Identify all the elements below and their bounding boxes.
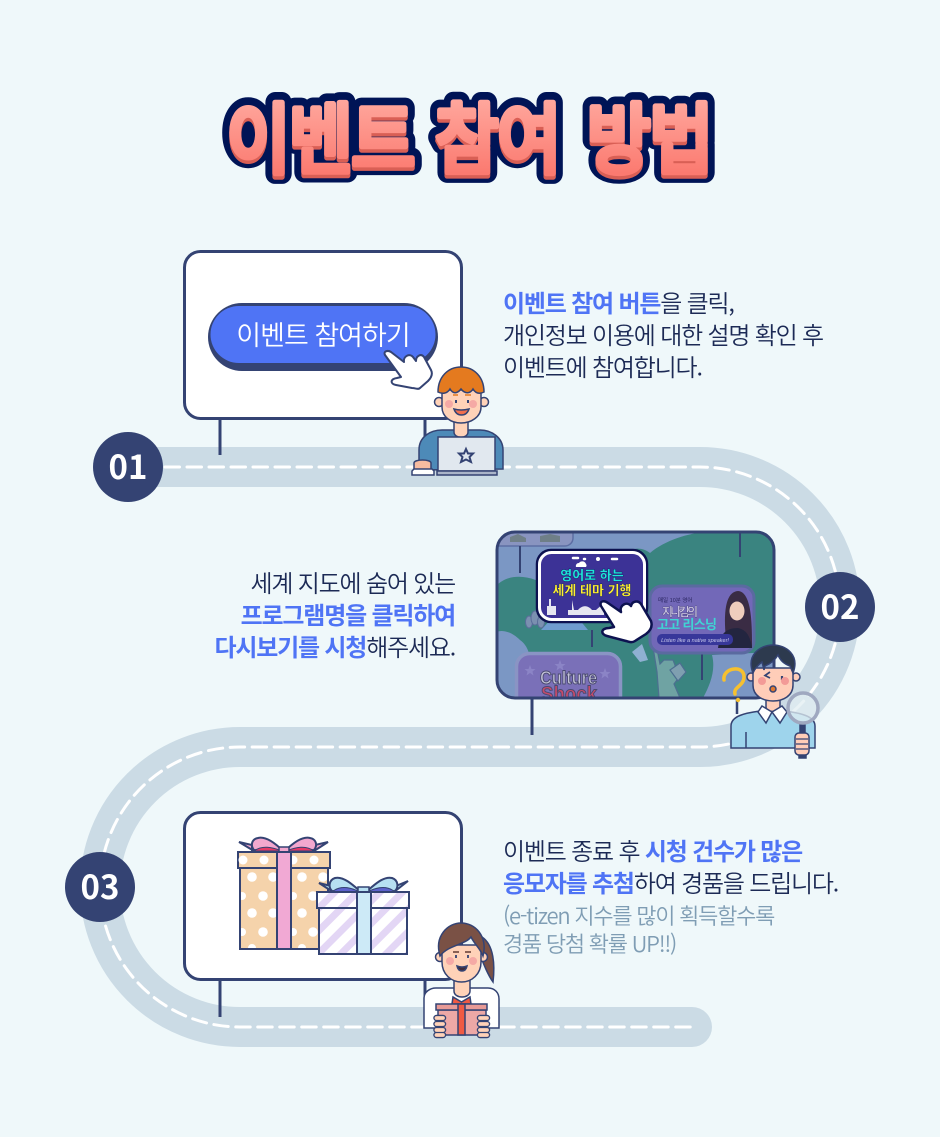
character: boy with magnifier	[731, 645, 818, 758]
step 2 text: 프로그램명을 클릭하여	[241, 596, 455, 631]
step 1 text: 이벤트에 참여합니다.	[503, 348, 702, 383]
step 3 note: (e-tizen 지수를 많이 획득할수록	[503, 899, 775, 931]
icon: polka dot gift	[238, 838, 330, 952]
map card: culture shock: Culture	[540, 668, 597, 688]
map card: highlighted program: 영어로 하는	[560, 565, 624, 584]
map card: listening	[650, 586, 754, 653]
title: 이벤트	[226, 79, 414, 190]
title: 이벤트	[226, 82, 414, 193]
map card: top left	[498, 534, 574, 547]
badge: 03	[65, 852, 135, 922]
title: 방법	[587, 79, 711, 190]
map card: culture shock: Shock	[541, 683, 597, 706]
panel: step 3 billboard	[184, 812, 462, 1017]
button: event participation	[208, 303, 438, 371]
step 2 text: 세계 지도에 숨어 있는	[251, 564, 455, 599]
map card: listening: Listen like a native speaker!	[661, 638, 729, 644]
title: 이벤트	[226, 79, 414, 190]
button: event participation: 이벤트 참여하기	[236, 314, 410, 353]
character: boy with laptop	[412, 367, 503, 475]
title	[226, 79, 711, 193]
badge: 03: 03	[81, 861, 119, 909]
title: 참여	[435, 82, 559, 193]
icon: question mark	[724, 669, 744, 702]
icon: striped gift	[317, 878, 409, 954]
step 3 text: 응모자를 추첨하여 경품을 드립니다.	[503, 864, 838, 899]
step 2 text: 다시보기를 시청해주세요.	[214, 628, 455, 663]
panel: step 2 map billboard	[65, 432, 875, 1035]
map: trees	[526, 611, 544, 628]
step 3 text: 이벤트 종료 후 시청 건수가 많은	[503, 832, 802, 867]
map card: listening: 고고 리스닝	[657, 614, 717, 633]
map card: listening: 지나킴의	[662, 603, 698, 620]
icon: gifts	[238, 838, 409, 954]
badge: 01: 01	[109, 441, 147, 489]
step 1 text: 개인정보 이용에 대한 설명 확인 후	[503, 316, 823, 351]
map card: highlighted program	[537, 550, 647, 622]
panel: step 1 billboard	[184, 252, 462, 455]
title: 방법	[587, 79, 711, 190]
map card: highlighted program: 세계 테마 기행	[552, 580, 632, 599]
character: girl with gift	[424, 923, 499, 1035]
woman portrait	[718, 591, 752, 648]
title: 참여	[435, 79, 559, 190]
title: 방법	[587, 82, 711, 193]
map: light patch and lake	[632, 644, 648, 662]
map card: listening: 매일 10분 영어	[658, 596, 692, 604]
title: 참여	[435, 79, 559, 190]
icon: pointing hand 1	[385, 351, 432, 389]
road	[100, 467, 840, 1027]
badge: 02	[805, 572, 875, 642]
map: statue	[653, 647, 686, 698]
badge: 01	[93, 432, 163, 502]
icon: pointing hand 2	[601, 601, 652, 642]
map: continents	[497, 532, 774, 698]
step 1 text: 이벤트 참여 버튼을 클릭,	[503, 284, 734, 319]
step 3 note: 경품 당첨 확률 UP!!)	[503, 927, 676, 959]
map card: culture shock	[515, 652, 622, 696]
badge: 02: 02	[821, 581, 859, 629]
